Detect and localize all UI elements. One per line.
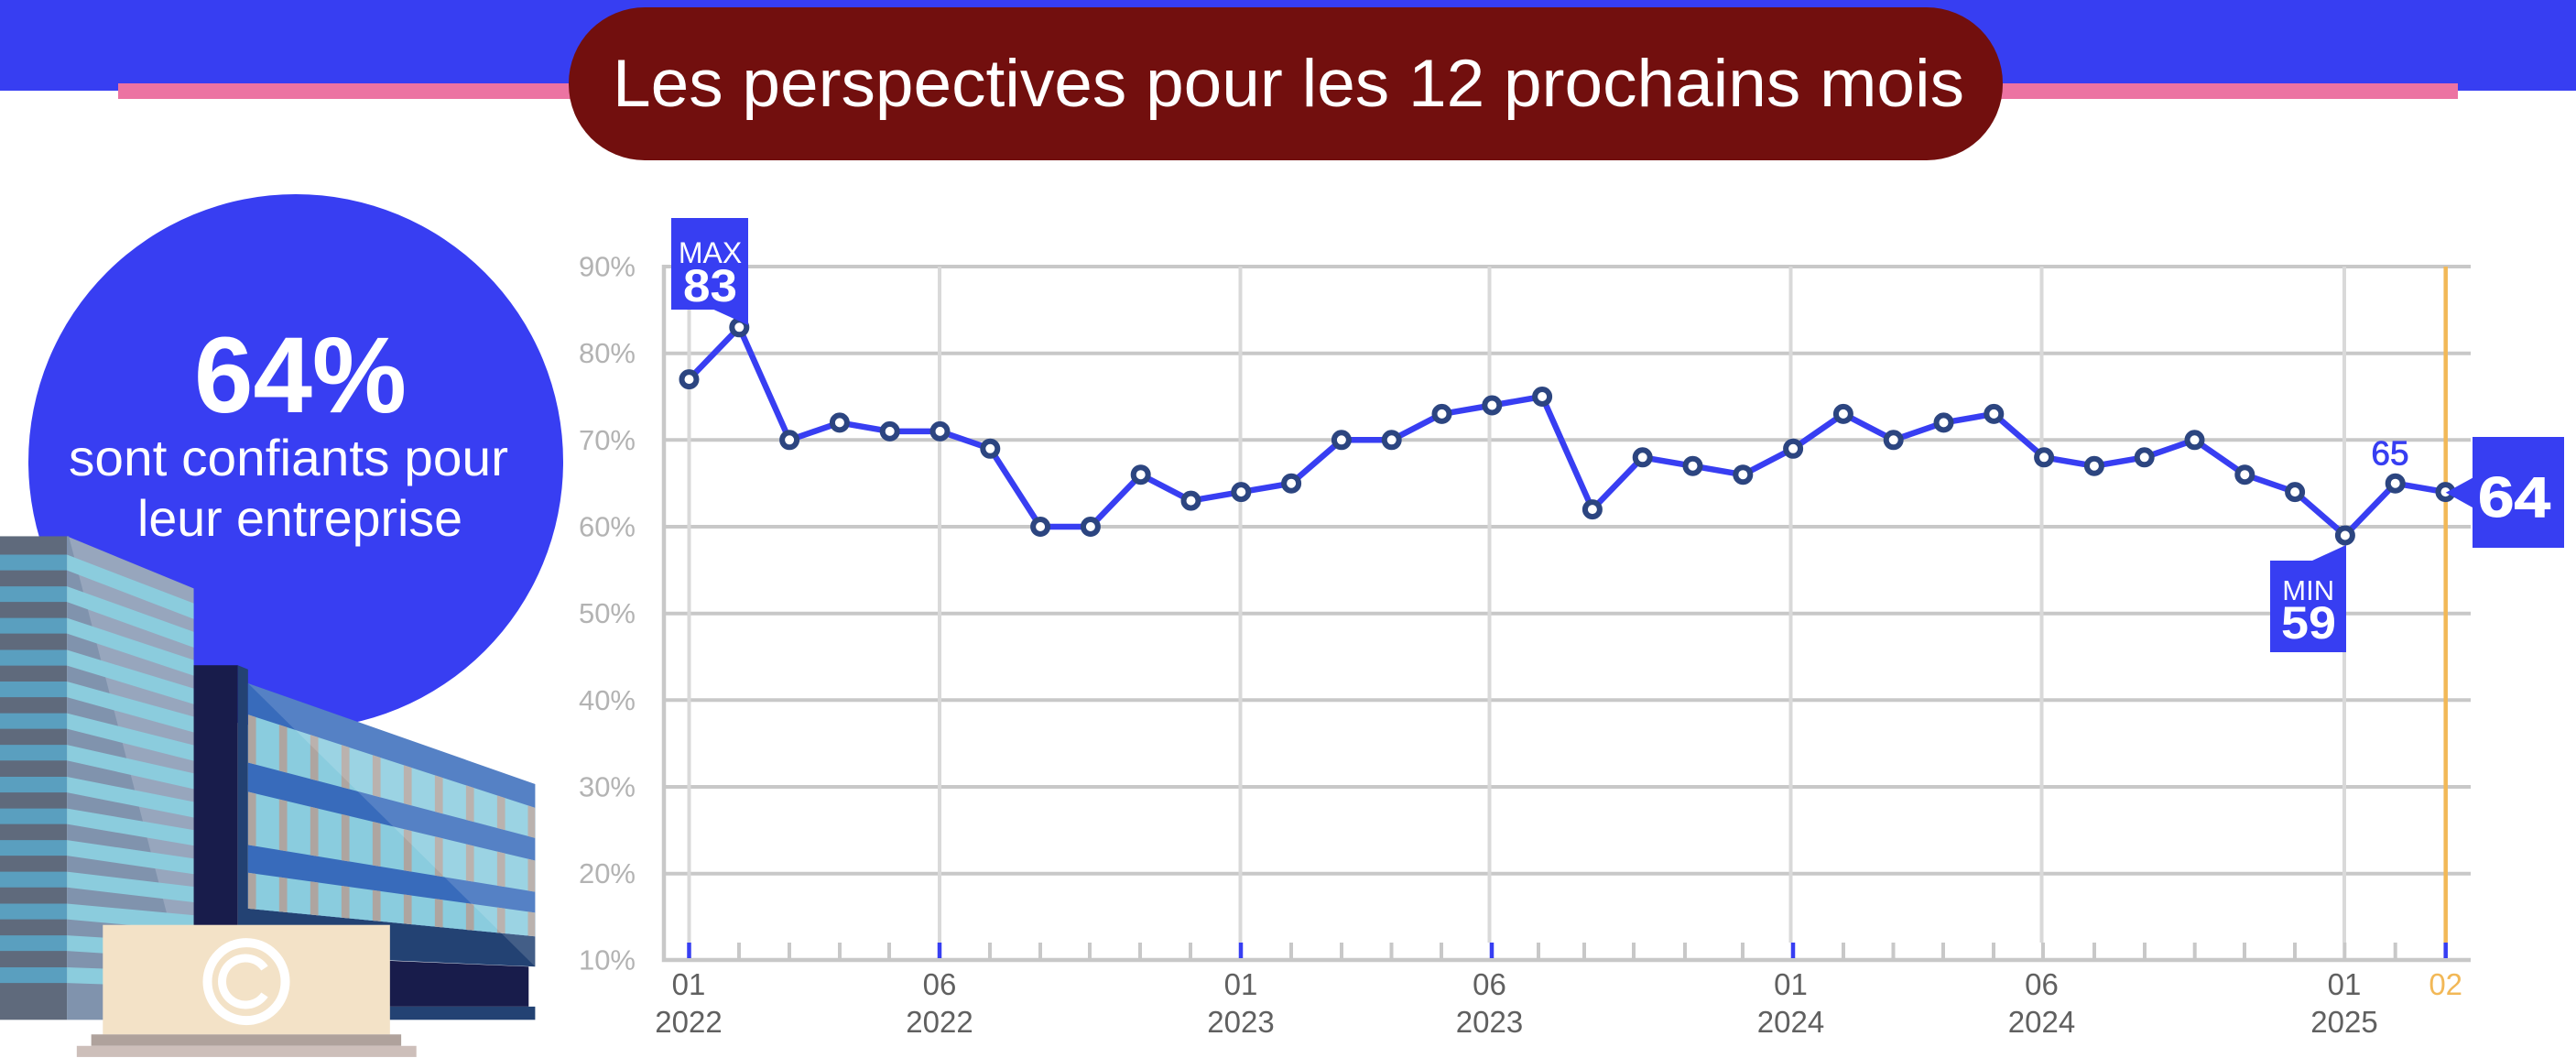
circle caption line 1: sont confiants pour (69, 429, 508, 486)
header: blue band, pink rule and title pill (0, 0, 2576, 160)
title: Les perspectives pour les 12 prochains mois (613, 47, 1964, 121)
x-axis labels: 2024 (2008, 1005, 2075, 1039)
current month marker line (2443, 267, 2448, 943)
x-axis labels: 02 (2429, 967, 2462, 1001)
x-axis labels: 2024 (1757, 1005, 1824, 1039)
y-axis labels: 80% (579, 337, 636, 369)
axes (664, 265, 2471, 960)
chart: confidence line chart (579, 218, 2564, 1039)
x-axis labels: 2025 (2310, 1005, 2378, 1039)
circle caption line 2: leur entreprise (137, 489, 462, 547)
y-axis labels: 30% (579, 771, 636, 802)
x-axis labels: 2022 (906, 1005, 973, 1039)
y-axis labels: 20% (579, 857, 636, 889)
icon: copyright mark (207, 943, 286, 1020)
callout: latest value 64 (2446, 437, 2564, 548)
panel: confidence circle (28, 194, 563, 729)
big percentage: 64% (194, 315, 407, 436)
data line (689, 327, 2445, 535)
x-axis labels: 06 (1473, 967, 1506, 1001)
callout: latest value 64: 64 (2478, 466, 2551, 529)
vertical major grid lines (689, 267, 2344, 943)
x-axis labels (655, 967, 2462, 1039)
y-axis labels: 50% (579, 597, 636, 629)
callout: max 83: MAX (679, 236, 742, 269)
x-axis labels: 06 (923, 967, 956, 1001)
x-axis labels: 01 (1224, 967, 1257, 1001)
callout: max 83: 83 (683, 260, 737, 311)
y-axis labels: 90% (579, 251, 636, 282)
x-axis labels: 2022 (655, 1005, 723, 1039)
x-axis labels: 01 (1774, 967, 1808, 1001)
icon: office building with copyright plinth (0, 536, 535, 1057)
y-axis labels: 10% (579, 943, 636, 976)
y-axis labels: 60% (579, 511, 636, 542)
x-axis labels: 06 (2025, 967, 2059, 1001)
callout: max 83 (671, 218, 748, 325)
callout: min 59: MIN (2282, 574, 2334, 606)
y-axis labels: 70% (579, 424, 636, 456)
data label: 65: 65 (2371, 434, 2409, 473)
horizontal grid lines (664, 267, 2471, 874)
y-axis labels: 40% (579, 684, 636, 716)
x-axis labels: 2023 (1456, 1005, 1523, 1039)
callout: min 59 (2270, 545, 2346, 652)
data point markers (681, 320, 2452, 542)
x-axis labels: 2023 (1207, 1005, 1275, 1039)
minor month ticks (739, 943, 2396, 958)
x-axis labels: 01 (672, 967, 705, 1001)
callout: min 59: 59 (2281, 597, 2336, 649)
y-axis labels (579, 251, 636, 976)
highlighted blue ticks (689, 943, 2446, 958)
x-axis labels: 01 (2328, 967, 2361, 1001)
